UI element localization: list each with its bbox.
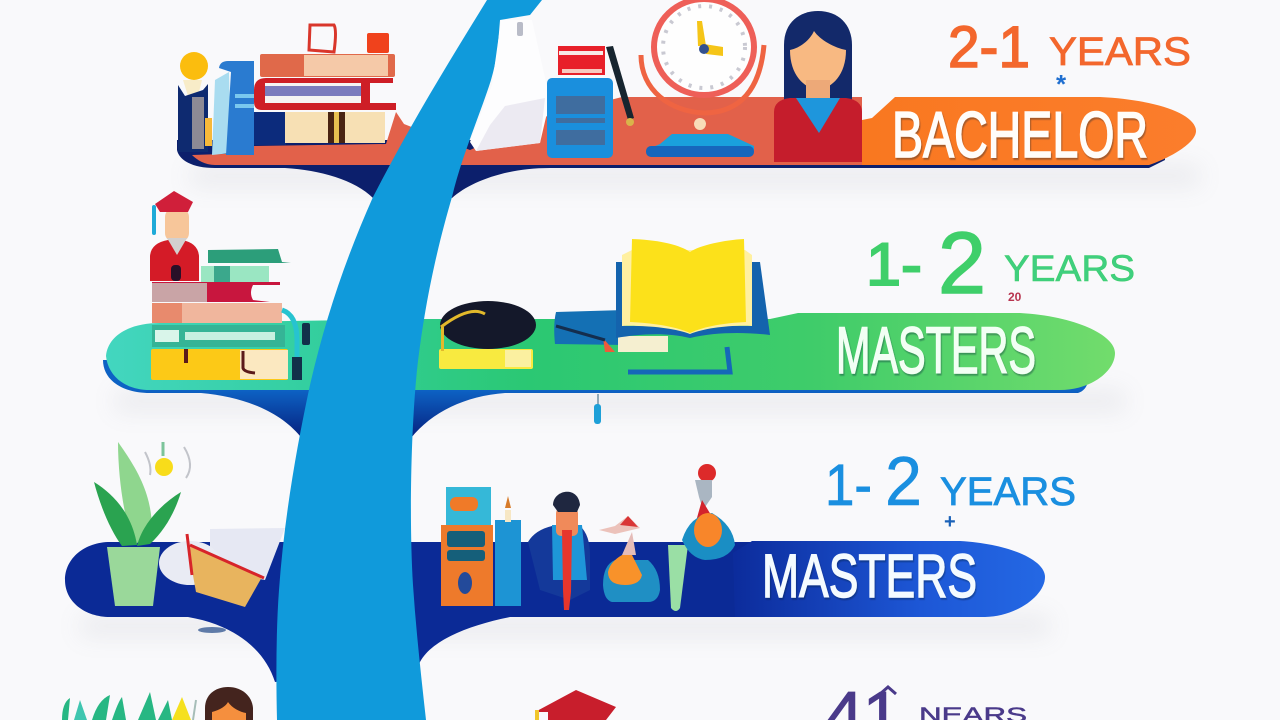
heading: 1-2 years green: YEARS <box>1004 248 1135 289</box>
icon: open yellow book <box>616 239 770 338</box>
label: bachelor: BACHELOR <box>892 98 1148 171</box>
icon: light bulb <box>180 52 208 96</box>
icon: woman <box>774 11 862 162</box>
shelf 1 salmon surface <box>192 97 862 165</box>
icon: blue device <box>547 78 613 158</box>
shelf 2 green surface <box>106 313 1115 390</box>
branch 1 shelf: bachelor <box>177 97 1165 198</box>
branch 1 items <box>178 0 862 162</box>
shelf 1 navy base and stem <box>177 140 1165 198</box>
icon: white paper <box>470 20 550 151</box>
icon: hanging tassel <box>594 394 601 424</box>
icon: white bowl and paper <box>159 528 285 585</box>
bottom branch: red graduation cap <box>535 690 616 720</box>
icon: left book group <box>178 61 254 155</box>
icon: red book on device <box>558 46 605 75</box>
icon: blue ledge line <box>628 347 730 372</box>
central blue trunk <box>276 0 542 720</box>
icon: graduate figure <box>150 191 199 281</box>
heading: 1-2 years blue <box>825 442 1076 520</box>
small mark: 20 <box>1008 290 1022 304</box>
icon: teal handle <box>282 310 310 380</box>
shelf shadows <box>80 165 1200 637</box>
bottom branch: plants row <box>62 692 196 720</box>
label: masters blue: MASTERS <box>762 542 977 610</box>
branch 3 shelf: masters blue <box>65 541 1045 682</box>
icon: person with scarf <box>528 492 590 610</box>
icon: blue mortarboard <box>554 310 625 345</box>
heading: 1-2 years green: 1- <box>866 231 922 298</box>
icon: flower <box>145 442 190 478</box>
branch 1 orange tab <box>862 97 1196 165</box>
icon: potted plant <box>94 442 181 606</box>
shelf 2 blue base and stem <box>103 360 1089 438</box>
icon: test tube <box>668 545 688 611</box>
branch 3 items <box>94 442 735 633</box>
icon: book stack left <box>151 282 288 380</box>
heading: bottom years <box>826 680 1027 720</box>
plus mark: * <box>1056 69 1067 99</box>
icon: orange cabinet <box>441 487 493 606</box>
heading: 1-2 years green <box>866 215 1135 312</box>
icon: flask one <box>599 516 660 602</box>
icon: black graduation cap <box>440 301 536 351</box>
bottom branch: person head <box>205 687 253 720</box>
icon: green books <box>201 249 291 282</box>
label: masters green: MASTERS <box>836 313 1036 387</box>
branch 2 items <box>150 191 770 424</box>
icon: red square <box>367 33 389 53</box>
icon: flask two <box>682 464 735 560</box>
icon: clock <box>641 0 764 157</box>
icon: small dark object under shelf <box>198 627 226 633</box>
shelf 3 navy surface and stem <box>65 542 752 682</box>
icon: pen <box>606 46 634 126</box>
heading: 2-1 years: YEARS <box>1049 30 1191 74</box>
shelf 3 blue tab <box>733 541 1045 617</box>
icon: red frame <box>309 25 336 52</box>
icon: small book with red triangle <box>556 326 668 352</box>
heading: 1-2 years green: 2 <box>938 215 986 312</box>
heading: 1-2 years blue: YEARS <box>940 470 1076 514</box>
plus mark: + <box>944 511 956 533</box>
heading: 1-2 years blue: 1- <box>825 453 872 518</box>
icon: book stack <box>254 54 396 145</box>
branch 2 shelf: masters green <box>103 313 1115 438</box>
icon: tan book <box>187 534 264 607</box>
heading: 2-1 years: 2-1 <box>948 15 1030 80</box>
heading: 2-1 years <box>948 15 1191 80</box>
icon: yellow book under cap <box>439 349 533 369</box>
heading: 1-2 years blue: 2 <box>885 442 922 520</box>
icon: blue book with candle <box>495 496 521 606</box>
